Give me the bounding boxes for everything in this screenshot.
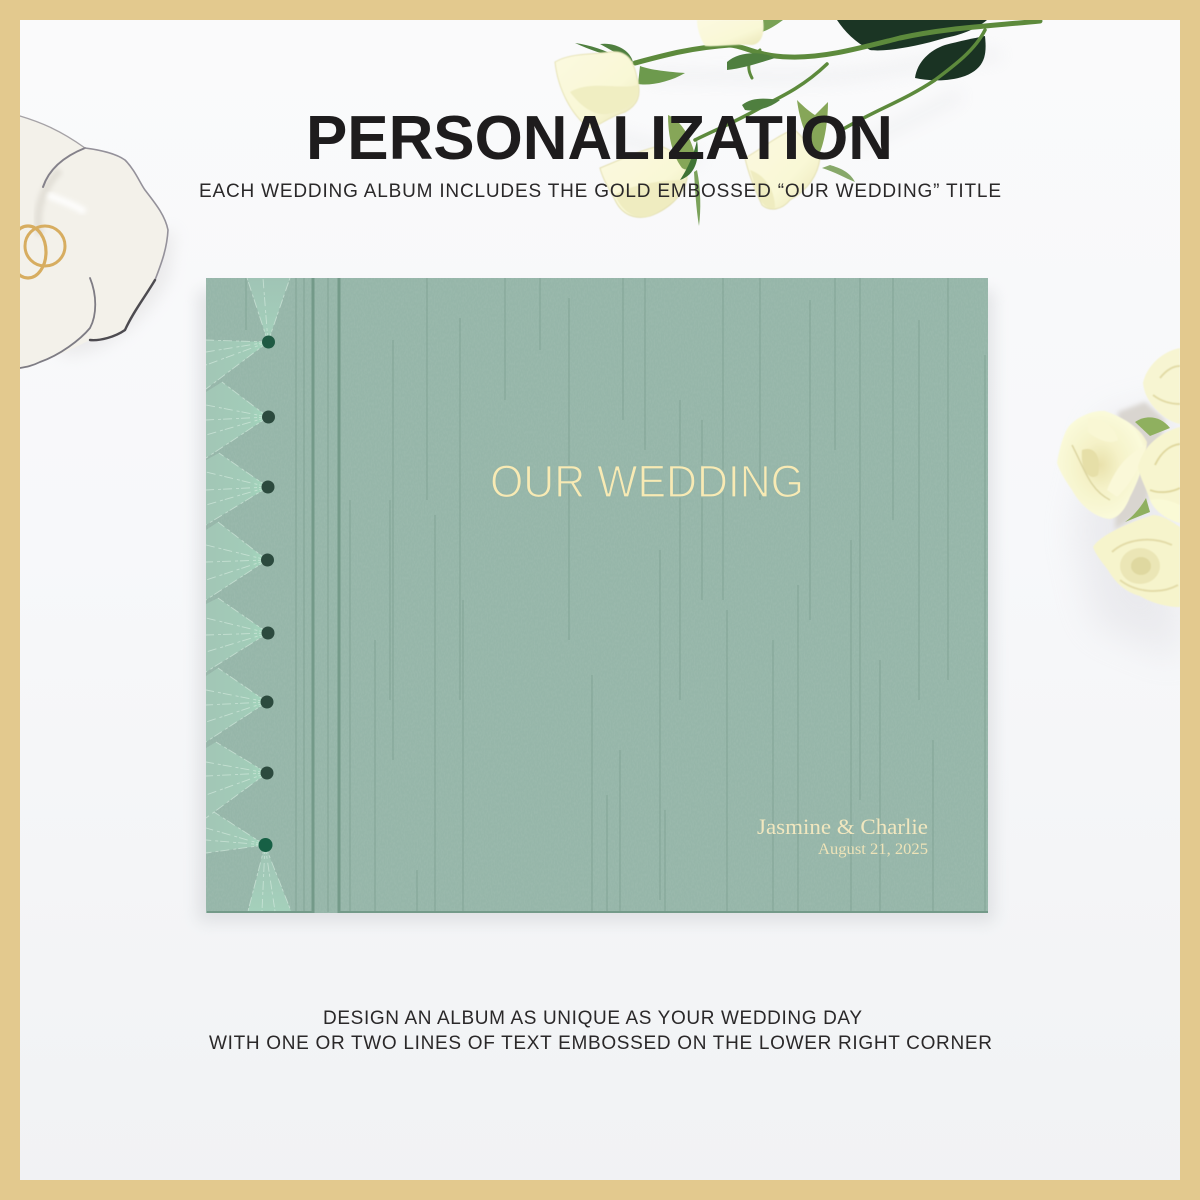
gold rings (10, 226, 65, 278)
stitch fan 2 (206, 382, 268, 458)
album grain (206, 278, 988, 913)
stitch top fan (247, 278, 290, 342)
album shadow (198, 290, 994, 922)
icon: white roses, right (1057, 348, 1180, 660)
stitch fan 1 (206, 340, 268, 389)
green sepals over buds (668, 100, 855, 182)
rose bud top (697, 20, 764, 46)
dish body (20, 116, 168, 368)
silver rims (20, 116, 168, 368)
spine score lines (207, 278, 988, 913)
caption line 1: DESIGN AN ALBUM AS UNIQUE AS YOUR WEDDING DAY (323, 1008, 862, 1029)
stitch fan 5 (206, 598, 268, 672)
album board (206, 278, 988, 913)
rose D (1093, 515, 1180, 607)
green leaves (1125, 417, 1170, 522)
album title foil: OUR WEDDING (490, 456, 804, 507)
icon: porcelain dish with gold rings (10, 116, 175, 368)
stitch bottom fan (248, 845, 291, 911)
stitch fan 4 (206, 522, 267, 600)
dish shadow (60, 230, 175, 355)
caption line 2: WITH ONE OR TWO LINES OF TEXT EMBOSSED ON THE LOWER RIGHT CORNER (209, 1033, 992, 1054)
dark leaves (837, 20, 987, 80)
embossed date: August 21, 2025 (818, 841, 928, 858)
heading: PERSONALIZATION (306, 104, 893, 173)
metallic thread highlights (206, 278, 291, 911)
stitch fan 7 (206, 742, 267, 818)
ribbon stitching (206, 278, 291, 911)
stems (635, 21, 1040, 140)
rose bud left (555, 52, 639, 127)
rose A (1057, 411, 1147, 519)
petal highlights (48, 195, 85, 212)
subheading: EACH WEDDING ALBUM INCLUDES THE GOLD EMBOSSED “OUR WEDDING” TITLE (199, 181, 1001, 202)
rose C (1138, 427, 1180, 523)
small sepals and leaflets (575, 20, 783, 226)
branch soft shadows (610, 55, 1000, 160)
dish folds shading (38, 170, 60, 235)
stitch fan 8 (206, 812, 265, 853)
punched holes (258, 336, 275, 852)
roses shadow (1075, 400, 1180, 660)
rose B (1143, 348, 1180, 424)
embossed names: Jasmine & Charlie (757, 814, 928, 839)
rose bud centre (600, 146, 687, 217)
icon: roses branch, top (555, 20, 1040, 226)
silk vertical slubs (246, 278, 985, 912)
rose bud right (745, 130, 820, 209)
shaded gap between roses (1115, 402, 1165, 530)
stitch fan 3 (206, 453, 268, 525)
stitch fan 6 (206, 668, 267, 742)
panel: wedding album cover (206, 278, 988, 913)
